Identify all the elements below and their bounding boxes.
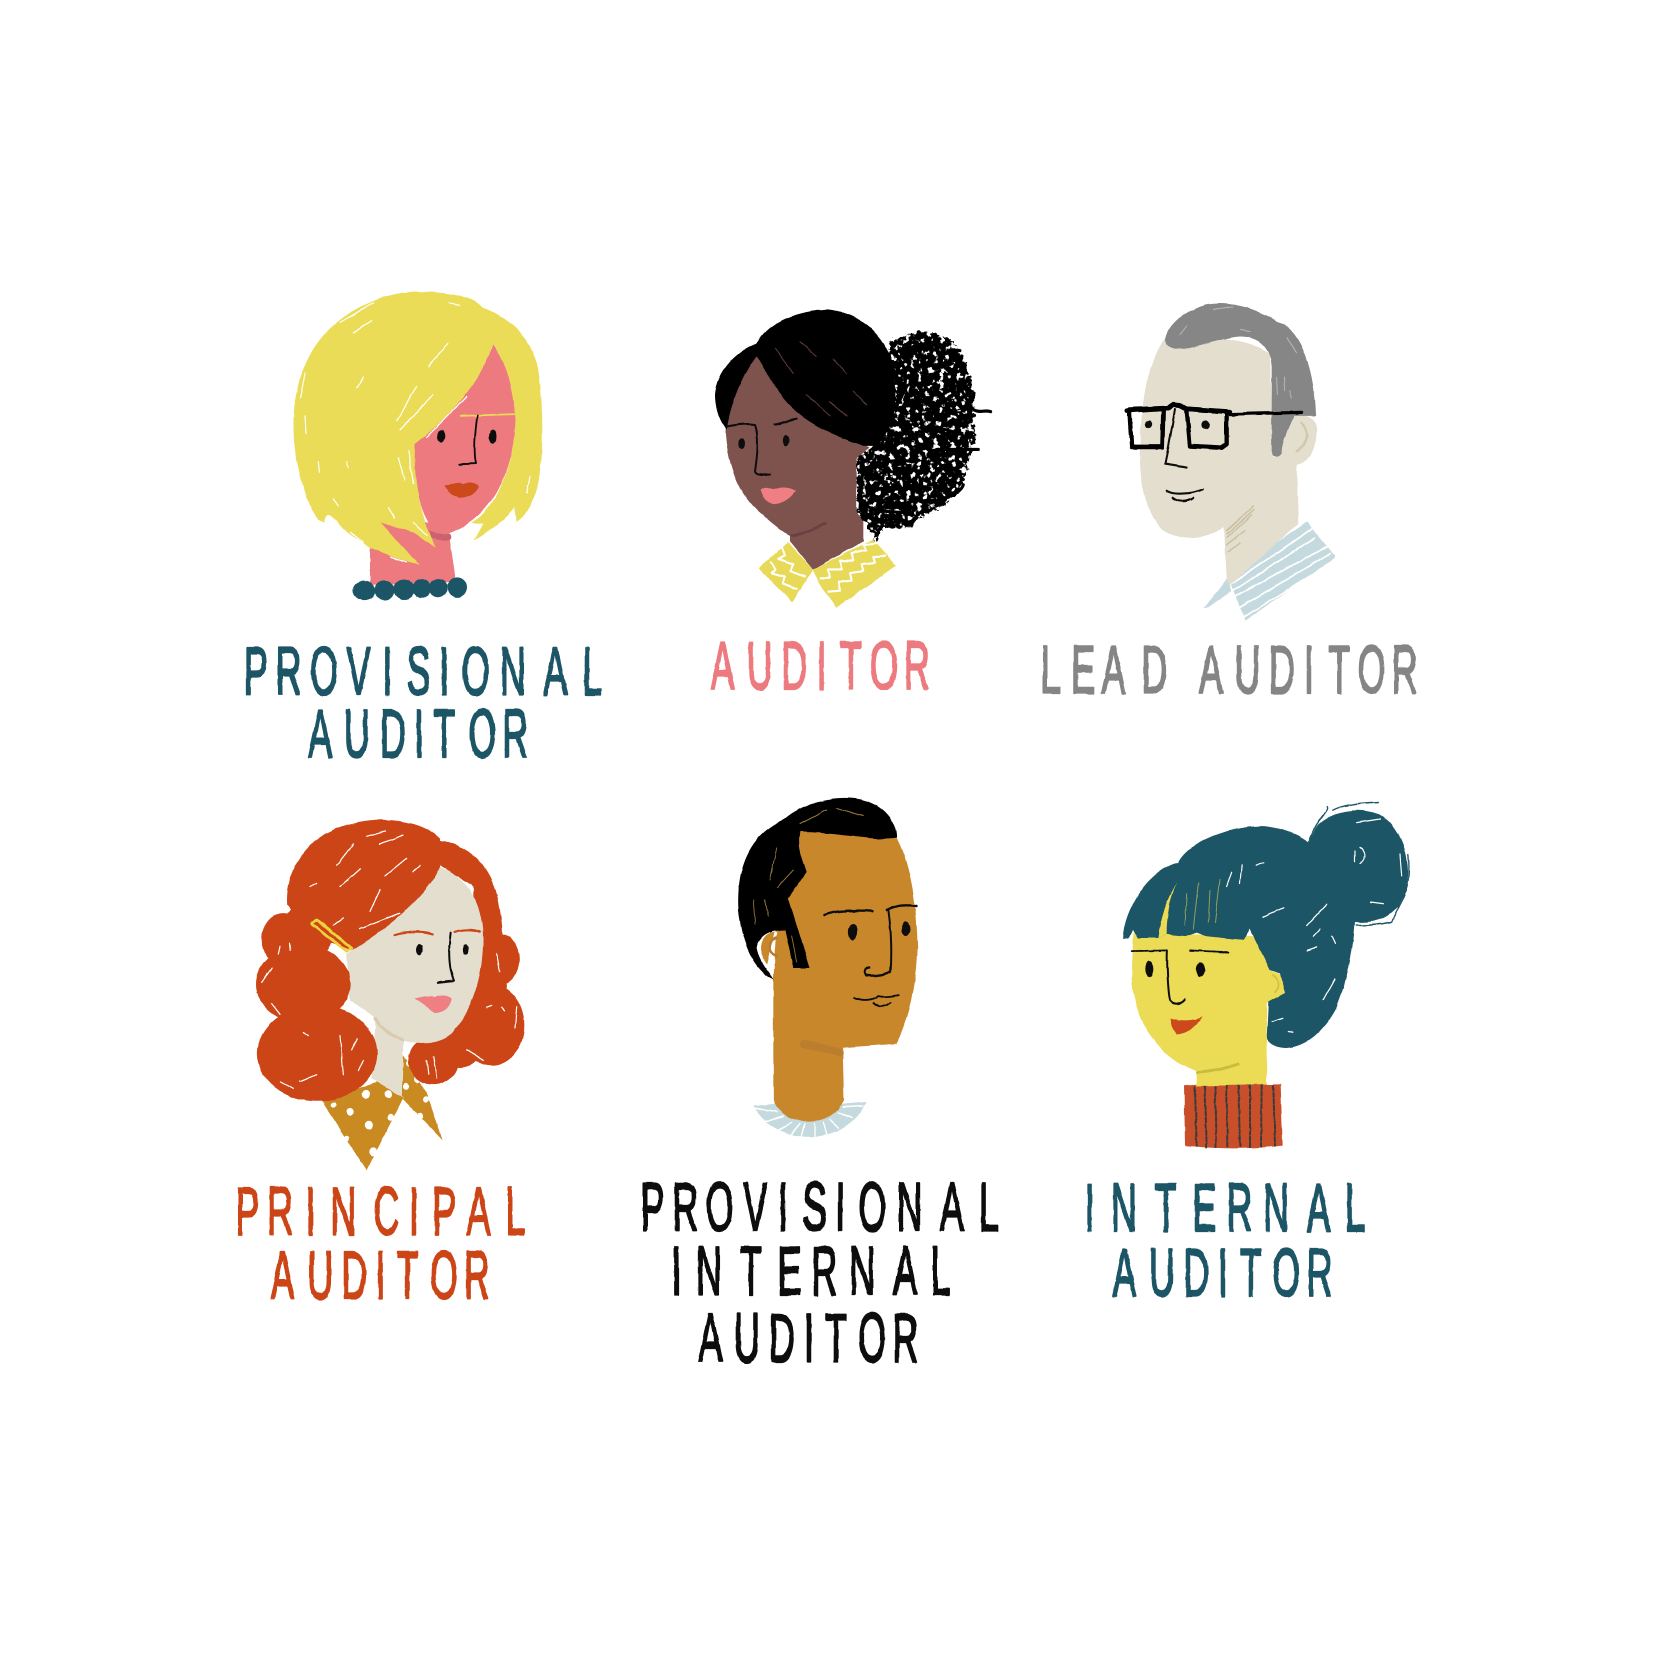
face and neck [1132, 933, 1286, 1086]
portrait: red-haired woman [256, 820, 524, 1170]
eyes [1145, 420, 1209, 429]
hair highlights [1180, 306, 1297, 398]
ear shading [1273, 975, 1279, 992]
curls on the right [408, 934, 524, 1085]
glasses [1127, 405, 1302, 448]
nose [437, 933, 454, 982]
collar dots [331, 1062, 429, 1156]
label: internal auditor [1085, 1170, 1365, 1311]
turtleneck ribs [1195, 1085, 1275, 1148]
label: principal auditor: AUDITOR [271, 1237, 490, 1313]
shirt collar [1203, 522, 1336, 621]
lips [761, 488, 796, 504]
ruff collar [753, 1102, 867, 1137]
neck [372, 1028, 403, 1097]
brows and nose [727, 419, 797, 475]
turtleneck [1184, 1084, 1283, 1148]
hair highlights [753, 808, 863, 962]
fringe strands [1185, 879, 1220, 929]
panel: provisional auditor [244, 292, 602, 772]
face and neck [725, 345, 870, 569]
label: provisional auditor [244, 634, 602, 772]
back hair [467, 306, 542, 541]
curly ponytail [857, 332, 975, 541]
hair streaks [300, 303, 530, 562]
label: principal auditor: PRINCIPAL [236, 1173, 526, 1249]
ear shading [770, 938, 777, 956]
chin shadow [792, 524, 825, 535]
brows and nose [1132, 950, 1228, 952]
label: auditor: AUDITOR [711, 629, 930, 704]
neck [370, 518, 456, 585]
label: provisional auditor: AUDITOR [308, 697, 528, 772]
top hair [287, 820, 440, 950]
label: internal auditor: AUDITOR [1113, 1235, 1333, 1311]
lips [1171, 1017, 1203, 1035]
lips [415, 996, 452, 1013]
portrait: man with black hair [738, 798, 918, 1137]
hair [715, 309, 895, 446]
ear shading [1297, 423, 1307, 451]
panel: lead auditor [1041, 303, 1418, 708]
hair [738, 798, 897, 980]
fringe gap [1158, 883, 1177, 938]
front hair [293, 292, 493, 564]
label: principal auditor [236, 1173, 526, 1313]
collar zigzags [771, 543, 885, 592]
panel: internal auditor [1085, 802, 1409, 1311]
neck shadow [424, 531, 448, 537]
eyes [738, 435, 789, 449]
eyes [848, 922, 910, 940]
nose [459, 415, 477, 464]
panel: auditor [711, 309, 991, 704]
brows, nose and mouth [823, 905, 917, 976]
label: lead auditor: LEAD AUDITOR [1041, 633, 1418, 708]
eyes [416, 944, 469, 955]
label: provisional internal auditor: AUDITOR [698, 1300, 918, 1377]
portrait: woman with hair bun [1123, 802, 1409, 1148]
polka dot collar [320, 1055, 443, 1170]
lips [444, 482, 478, 498]
collar [758, 539, 896, 607]
shirt stripes [1232, 529, 1335, 617]
portrait: man with glasses [1127, 303, 1336, 621]
chin shadow [1197, 1064, 1238, 1073]
panel: principal auditor [236, 820, 526, 1313]
eyes [1145, 961, 1205, 977]
hair highlights [1227, 819, 1402, 1033]
face [347, 867, 483, 1043]
portrait: woman with curly ponytail [715, 309, 991, 607]
portrait: blonde woman [293, 292, 542, 601]
hair highlights [262, 831, 517, 1089]
head and neck [1140, 337, 1317, 585]
nose and mouth [1165, 409, 1203, 501]
eyebrow [460, 414, 515, 416]
hair [1165, 303, 1316, 456]
necklace [353, 577, 467, 601]
label: provisional internal auditor: PROVISIONAL [641, 1169, 999, 1245]
loose bun strands [1310, 802, 1409, 926]
neck shadow [803, 1044, 840, 1053]
label: provisional internal auditor [641, 1169, 999, 1377]
top right hair [440, 840, 503, 958]
label: internal auditor: INTERNAL [1085, 1170, 1365, 1246]
label: provisional internal auditor: INTERNAL [671, 1233, 951, 1309]
head and neck [761, 830, 918, 1122]
hair highlights [775, 342, 867, 416]
loose curls [860, 350, 991, 525]
hair and bun [1123, 810, 1408, 1048]
brows [394, 930, 480, 935]
hair clip [312, 920, 352, 951]
ruff lines [755, 1106, 863, 1137]
neck shading [1227, 506, 1254, 552]
eyes [437, 430, 497, 443]
face [410, 345, 515, 534]
panel: provisional internal auditor [641, 798, 999, 1377]
curls on the left [256, 904, 377, 1101]
chin shadow [375, 1019, 403, 1040]
label: provisional auditor: PROVISIONAL [244, 634, 602, 709]
